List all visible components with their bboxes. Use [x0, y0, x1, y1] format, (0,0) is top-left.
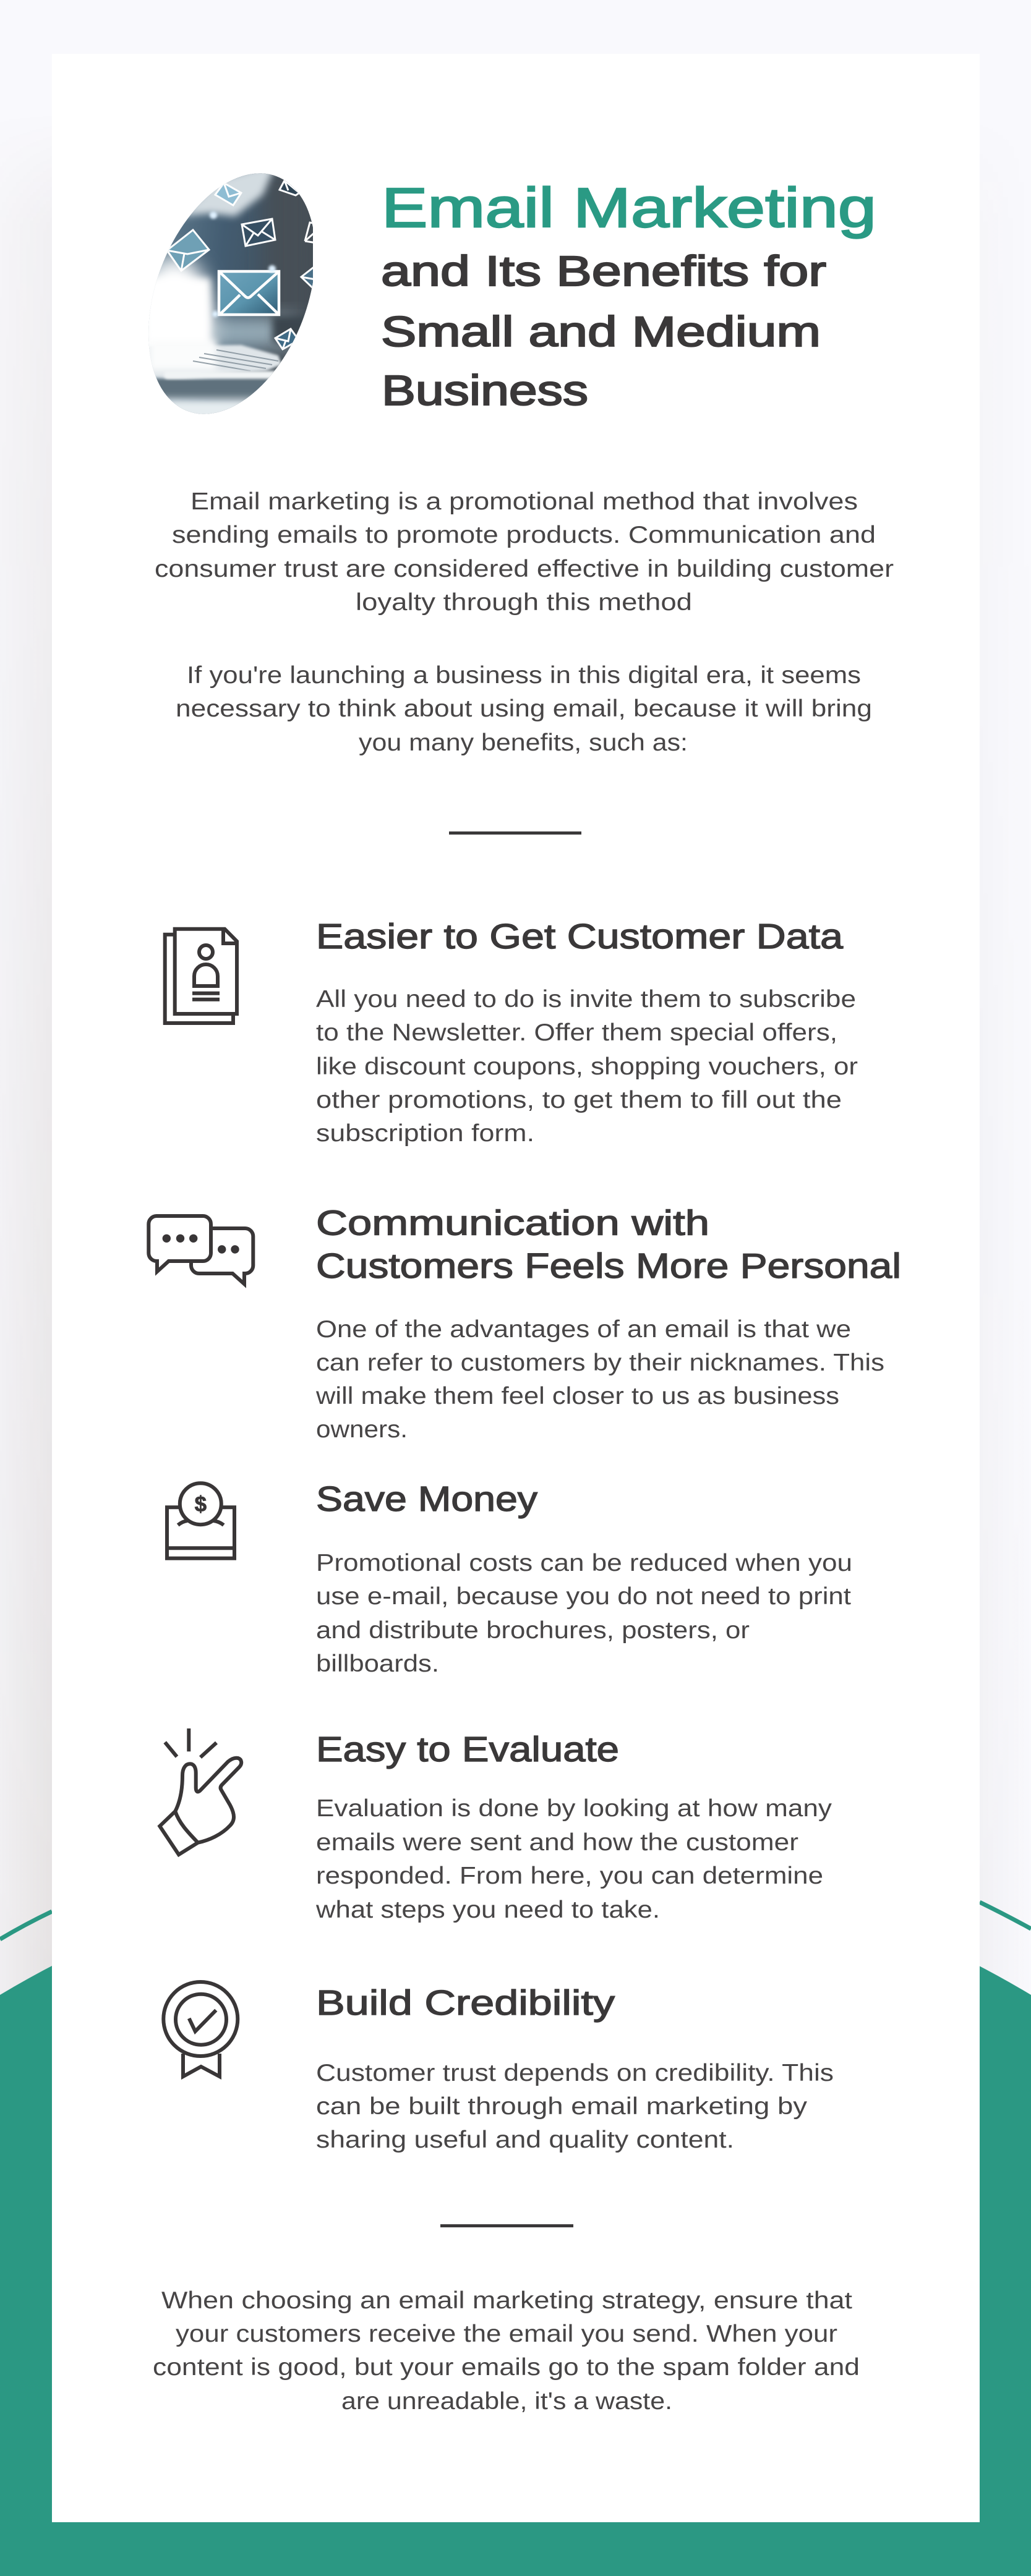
body text: other promotions, to get them to fill out the [316, 1087, 842, 1113]
heading: Build Credibility [316, 1983, 615, 2023]
glows [210, 211, 217, 219]
body text: use e-mail, because you do not need to print [316, 1583, 851, 1610]
body text: billboards. [316, 1651, 439, 1677]
body text: One of the advantages of an email is that we [316, 1316, 851, 1343]
body text: Evaluation is done by looking at how many [316, 1795, 832, 1822]
body text: subscription form. [316, 1120, 534, 1147]
main envelope [219, 271, 279, 315]
closing paragraph [153, 2287, 860, 2415]
intro paragraph 1: sending emails to promote products. Communication and [172, 522, 876, 548]
intro paragraph 1: consumer trust are considered effective in building customer [155, 556, 894, 582]
thin teal arc right [980, 1902, 1031, 1929]
body text [315, 1795, 832, 1923]
intro paragraph 2: If you're launching a business in this digital era, it seems [187, 662, 861, 689]
subtitle [381, 247, 826, 414]
body text: All you need to do is invite them to subscribe [316, 986, 856, 1013]
panel: communication feels more personal [148, 1204, 901, 1443]
panel: easy to evaluate [160, 1728, 832, 1923]
subtitle: and Its Benefits for [381, 247, 826, 295]
heading: Easy to Evaluate [316, 1730, 619, 1769]
body text: sharing useful and quality content. [316, 2127, 734, 2153]
title [381, 177, 876, 414]
closing paragraph: When choosing an email marketing strategy, ensure that [161, 2287, 852, 2314]
body text: Customer trust depends on credibility. This [316, 2060, 834, 2086]
right-middle envelope [303, 269, 313, 287]
intro paragraph 2: necessary to think about using email, because it will bring [176, 695, 872, 722]
subtitle: Small and Medium [381, 308, 821, 355]
heading: Easier to Get Customer Data [316, 917, 843, 956]
left envelope [168, 231, 207, 268]
body text: can refer to customers by their nicknames. This [316, 1350, 884, 1376]
body text: Promotional costs can be reduced when you [316, 1550, 852, 1576]
body text: what steps you need to take. [315, 1897, 660, 1923]
body text: and distribute brochures, posters, or [316, 1617, 750, 1644]
panel: save money [167, 1479, 852, 1677]
panel: build credibility [163, 1982, 834, 2153]
icon: money coin over envelope: $ [195, 1492, 207, 1516]
heading [316, 1204, 901, 1286]
body text [315, 1316, 884, 1443]
intro paragraph 2 [176, 662, 872, 756]
icon: snapping fingers [160, 1728, 241, 1855]
intro paragraph 2: you many benefits, such as: [359, 729, 688, 756]
closing paragraph: content is good, but your emails go to the spam folder and [153, 2354, 860, 2381]
thin teal arc left [0, 1911, 52, 1939]
top-right envelope [281, 183, 299, 194]
card shadow strips [0, 111, 1031, 2003]
body text [316, 1550, 852, 1677]
title line: Email Marketing: Email Marketing [382, 177, 876, 239]
icon: speech bubbles [148, 1216, 253, 1284]
body text: will make them feel closer to us as business [315, 1383, 839, 1409]
hero photo: laptop with email envelopes in tilted oval [148, 173, 313, 414]
panel: easier to get customer data [165, 917, 858, 1147]
upper envelope [243, 220, 274, 245]
body text: like discount coupons, shopping vouchers, or [316, 1053, 858, 1080]
intro paragraph 1: loyalty through this method [356, 589, 692, 616]
closing paragraph: your customers receive the email you send. When your [176, 2321, 837, 2347]
body text: to the Newsletter. Offer them special offers, [316, 1019, 837, 1046]
body text [316, 2060, 834, 2153]
body text: responded. From here, you can determine [316, 1863, 823, 1889]
icon: award ribbon with check [163, 1982, 237, 2077]
closing paragraph: are unreadable, it's a waste. [341, 2388, 672, 2415]
icon: money coin over envelope [167, 1483, 234, 1558]
teal background arc [0, 1852, 1031, 2576]
heading: Communication with [316, 1204, 709, 1243]
body text: can be built through email marketing by [316, 2093, 808, 2120]
body text: owners. [316, 1416, 408, 1443]
right envelope [304, 221, 313, 244]
lower-right envelope [277, 331, 296, 347]
laptop keyboard [148, 345, 281, 377]
intro paragraph 1 [155, 488, 894, 616]
body text [316, 986, 858, 1147]
subtitle: Business [382, 367, 588, 414]
heading: Customers Feels More Personal [316, 1246, 901, 1286]
icon: customer data document [165, 929, 237, 1023]
top envelope [216, 184, 239, 204]
heading: Save Money [316, 1479, 538, 1519]
body text: emails were sent and how the customer [316, 1829, 798, 1856]
intro paragraph 1: Email marketing is a promotional method that involves [190, 488, 858, 515]
